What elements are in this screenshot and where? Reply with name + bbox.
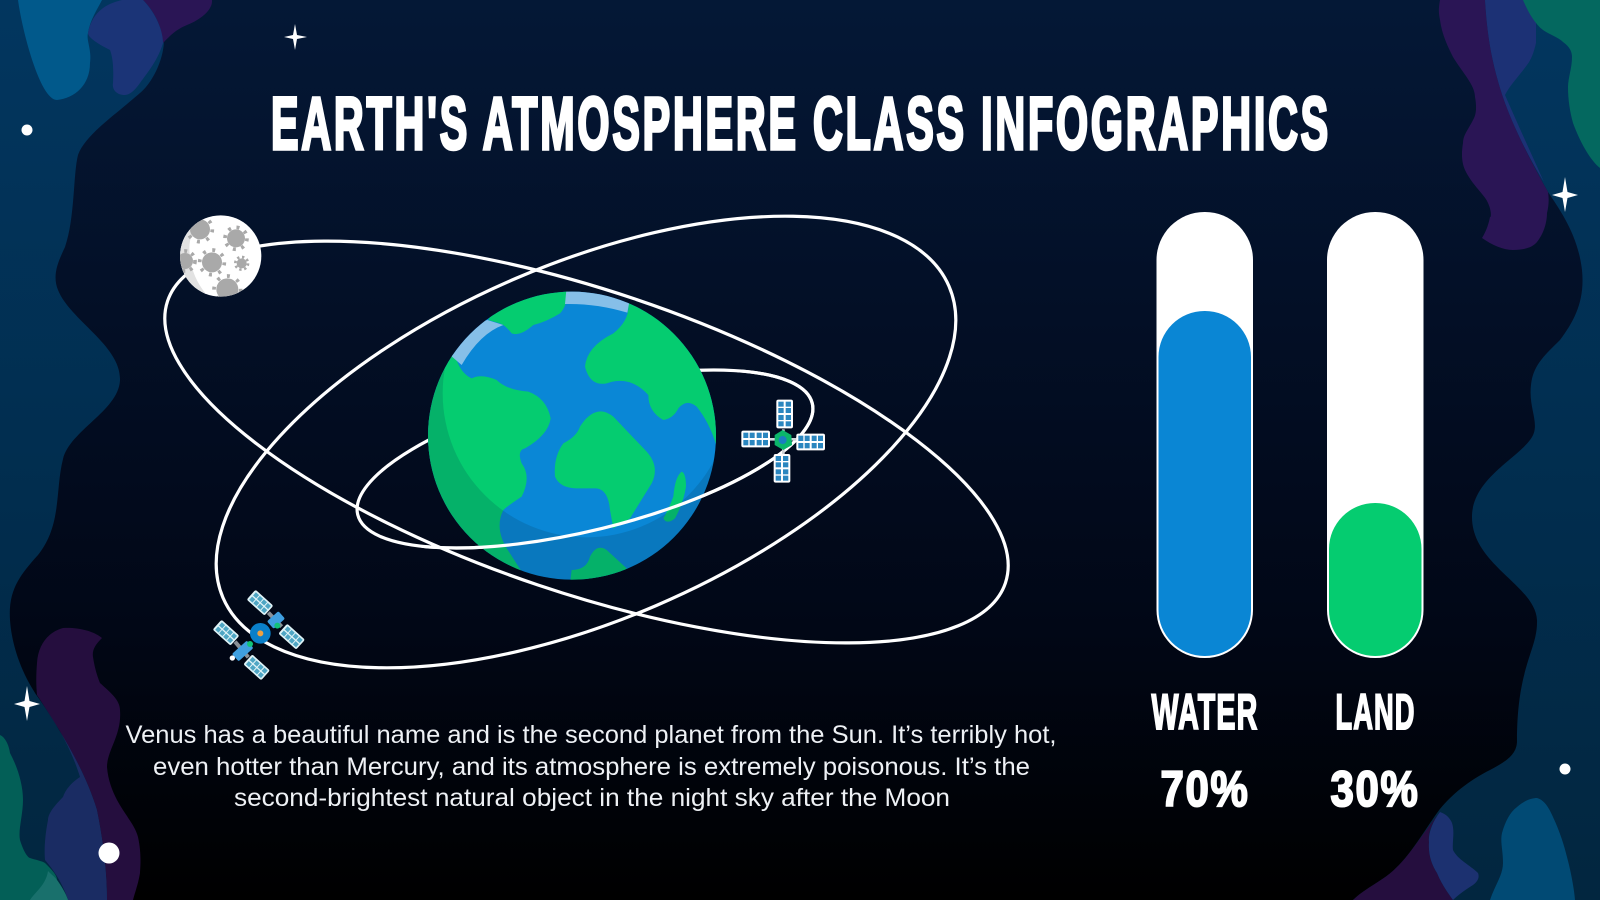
water value: 70% [1160, 761, 1250, 817]
bottom-left purple shape [36, 628, 140, 900]
bottom-left green shape [0, 735, 68, 900]
land gauge track [1327, 212, 1424, 658]
satellite left [213, 590, 305, 680]
bottom-left teal overlap [30, 871, 68, 900]
west continent [428, 354, 551, 570]
top-left navy shape [88, 0, 163, 95]
description text [126, 721, 1056, 812]
dot right [1560, 764, 1570, 774]
description text: even hotter than Mercury, and its atmosphere is extremely poisonous. It’s the [153, 753, 1030, 781]
left decorative waves [0, 0, 212, 900]
right decorative waves [1353, 0, 1600, 900]
moon [180, 215, 262, 297]
moon orbit [119, 158, 1054, 726]
east continent [585, 303, 716, 444]
central continent [555, 411, 655, 528]
inner orbit in front of earth [421, 370, 815, 550]
small island [663, 472, 686, 522]
water label: WATER [1152, 684, 1258, 740]
left blue wave [0, 0, 164, 900]
star top [284, 24, 307, 50]
land gauge [1327, 212, 1424, 658]
top-right purple shape [1439, 0, 1549, 250]
bottom-left navy shape [40, 700, 107, 900]
star left [14, 686, 40, 721]
north continent [488, 292, 568, 334]
right blue wave [1353, 0, 1600, 900]
land label: LAND [1336, 684, 1416, 740]
water gauge fill [1158, 311, 1251, 656]
description text: second-brightest natural object in the night sky after the Moon [234, 784, 950, 812]
bottom-right purple shape [1353, 812, 1453, 900]
bottom-right navy shape [1429, 812, 1479, 900]
dot bottom left [98, 842, 120, 864]
land value: 30% [1330, 761, 1420, 817]
south continent [570, 548, 627, 580]
earth shadow crescent [428, 368, 714, 580]
water gauge track [1156, 212, 1253, 658]
dot top left [22, 124, 32, 136]
top-right navy shape [1485, 0, 1544, 182]
top-left purple shape [143, 0, 212, 43]
land gauge fill [1329, 503, 1422, 656]
top-right teal shape [1523, 0, 1600, 168]
polar highlights [565, 292, 629, 313]
earth [428, 292, 716, 580]
orbit diagram [163, 214, 1010, 680]
large orbit [153, 123, 1019, 761]
satellite right [741, 400, 825, 483]
water gauge [1156, 212, 1253, 658]
description text: Venus has a beautiful name and is the second planet from the Sun. It’s terribly hot, [126, 721, 1056, 749]
bottom-right teal shape [1490, 798, 1575, 900]
inner orbit behind earth [341, 334, 829, 584]
star right [1552, 177, 1578, 212]
top-left bright blue shape [18, 0, 102, 100]
